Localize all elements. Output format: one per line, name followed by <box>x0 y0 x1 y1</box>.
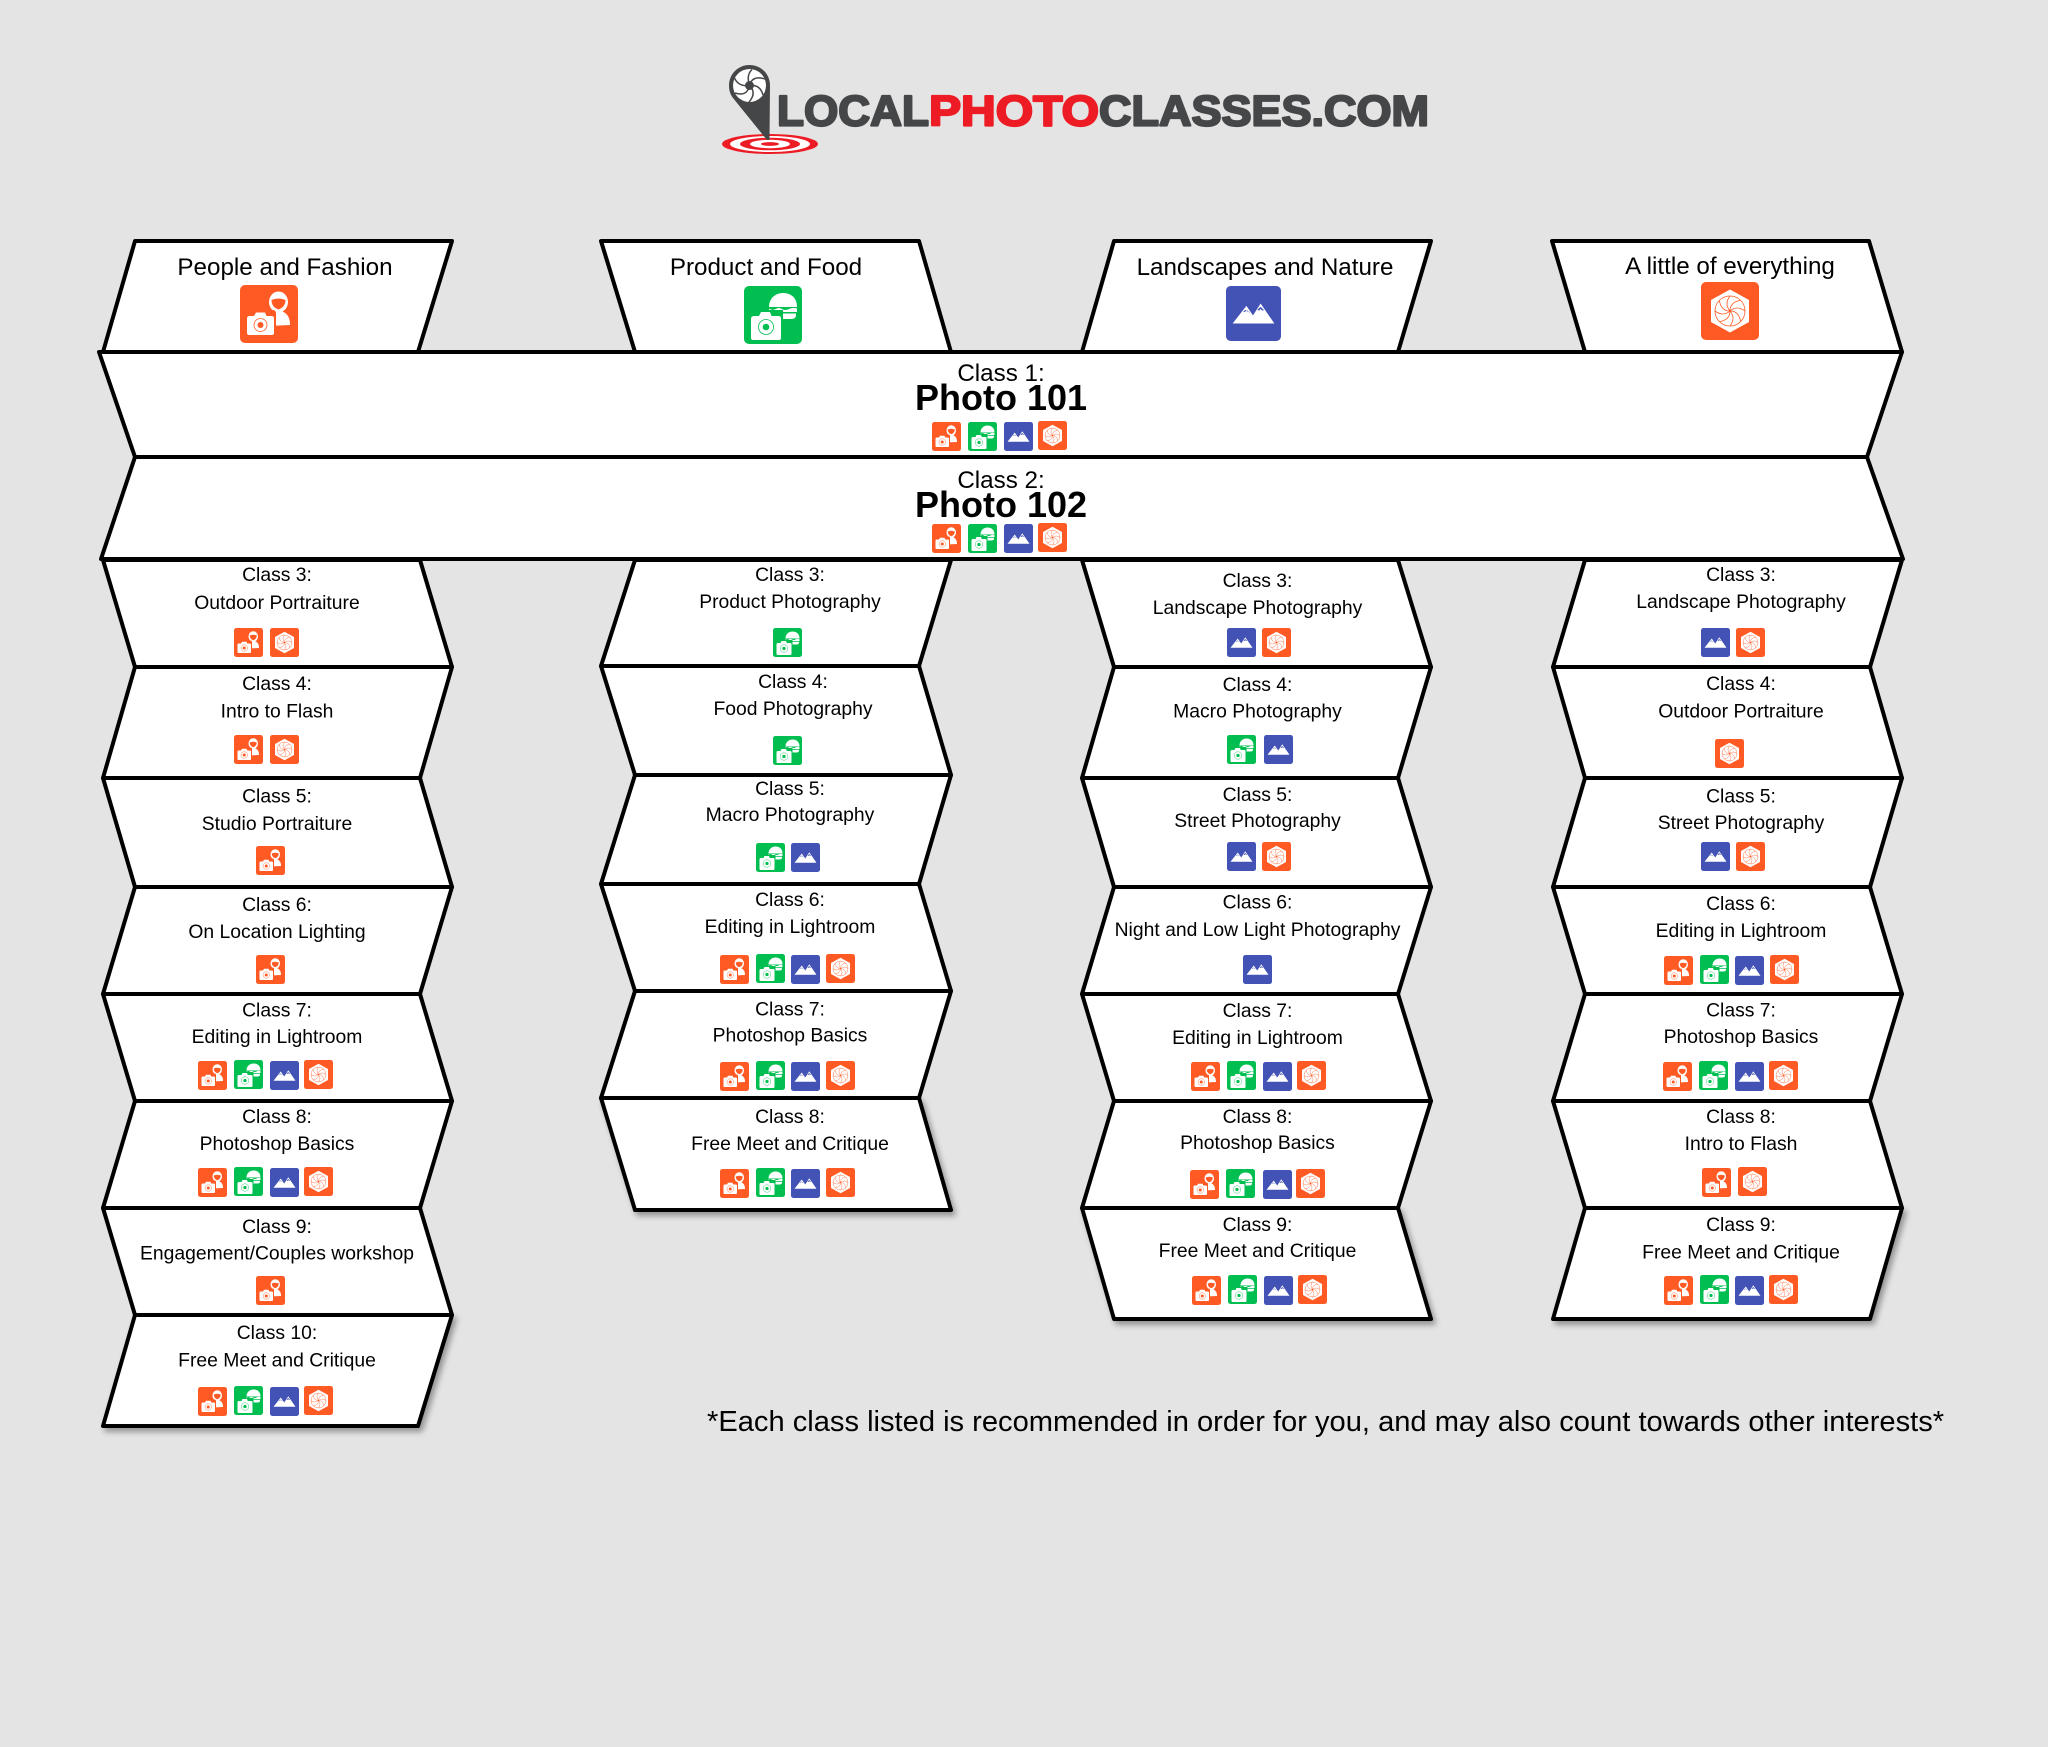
logo wordmark: CLASSES.COM <box>1099 88 1429 136</box>
band: Class 1 Photo 101: Photo 101 <box>915 377 1087 418</box>
card: Editing in Lightroom: Class 6: <box>1706 894 1776 915</box>
card: Free Meet and Critique: Free Meet and Critique <box>691 1134 889 1155</box>
icon: aperture pin <box>729 65 770 140</box>
card: Macro Photography: Class 5: <box>755 779 825 800</box>
card: Macro Photography: Macro Photography <box>1173 702 1342 722</box>
card: Intro to Flash: Intro to Flash <box>221 702 333 722</box>
card: Free Meet and Critique: Class 9: <box>1223 1215 1292 1236</box>
header: People and Fashion <box>103 241 452 352</box>
card: Editing in Lightroom: Class 6: <box>755 890 825 911</box>
card: Food Photography <box>601 666 951 775</box>
card: Street Photography <box>1082 778 1431 887</box>
header: People and Fashion: People and Fashion <box>177 254 393 281</box>
band: Class 1 Photo 101 <box>99 352 1902 457</box>
card: Free Meet and Critique <box>1082 1208 1431 1319</box>
card: On Location Lighting: On Location Lighting <box>188 922 366 943</box>
band: Class 2 Photo 102: Photo 102 <box>915 484 1087 525</box>
card: Free Meet and Critique: Class 10: <box>237 1323 317 1344</box>
card: Editing in Lightroom <box>1553 887 1902 994</box>
card: Landscape Photography: Class 3: <box>1223 571 1292 592</box>
header: A little of everything <box>1552 241 1902 352</box>
column: A little of everything classes <box>1553 560 1902 1319</box>
card: Street Photography: Street Photography <box>1658 813 1825 834</box>
header: Product and Food: Product and Food <box>670 254 862 281</box>
card: Food Photography: Food Photography <box>713 699 873 720</box>
card: Street Photography: Class 5: <box>1706 786 1776 808</box>
card: Photoshop Basics <box>1082 1101 1431 1208</box>
card: Photoshop Basics: Photoshop Basics <box>1180 1133 1335 1154</box>
card: Outdoor Portraiture <box>1553 667 1902 778</box>
card: Landscape Photography: Landscape Photography <box>1636 592 1846 613</box>
card: Free Meet and Critique <box>103 1315 452 1426</box>
card: Photoshop Basics: Photoshop Basics <box>1664 1027 1818 1048</box>
header: A little of everything: A little of everything <box>1625 253 1835 280</box>
card: Landscape Photography <box>1553 560 1902 667</box>
card: Photoshop Basics <box>103 1101 452 1208</box>
band: Class 1 Photo 101: Class 1: <box>957 360 1045 387</box>
card: Photoshop Basics: Class 7: <box>1706 1000 1776 1022</box>
card: Photoshop Basics: Photoshop Basics <box>713 1026 867 1046</box>
card: Engagement/Couples workshop <box>103 1208 452 1315</box>
card: Studio Portraiture: Class 5: <box>242 786 312 808</box>
card: Editing in Lightroom: Editing in Lightroom <box>1172 1028 1343 1049</box>
card: On Location Lighting <box>103 887 452 994</box>
card: Street Photography: Street Photography <box>1174 811 1341 832</box>
logo: LocalPhotoClasses.com <box>722 65 1429 154</box>
column: People and Fashion classes <box>103 560 452 1426</box>
header: Landscapes and Nature <box>1082 241 1431 352</box>
footnote: *Each class listed is recommended in order for you, and may also count towards other interests* <box>707 1406 1944 1438</box>
card: Street Photography: Class 5: <box>1223 785 1292 806</box>
icon: target <box>722 134 818 154</box>
card: Free Meet and Critique: Class 9: <box>1706 1215 1776 1236</box>
card: Editing in Lightroom: Class 7: <box>242 1000 312 1022</box>
card: Landscape Photography: Class 3: <box>1706 565 1776 586</box>
card: Editing in Lightroom: Editing in Lightroom <box>1656 921 1826 942</box>
card: Photoshop Basics: Class 8: <box>242 1107 312 1128</box>
card: Free Meet and Critique: Free Meet and Critique <box>178 1350 376 1372</box>
card: Night and Low Light Photography <box>1082 887 1431 994</box>
card: Studio Portraiture <box>103 778 452 887</box>
card: Photoshop Basics <box>1553 994 1902 1101</box>
band: Class 2 Photo 102 <box>101 457 1903 559</box>
card: Landscape Photography <box>1082 560 1431 667</box>
card: Editing in Lightroom <box>601 884 951 991</box>
card: Night and Low Light Photography: Class 6: <box>1223 892 1292 914</box>
card: Macro Photography: Macro Photography <box>706 805 875 826</box>
card: Photoshop Basics: Photoshop Basics <box>200 1134 354 1155</box>
column: Product and Food classes <box>601 560 951 1210</box>
card: Photoshop Basics <box>601 991 951 1098</box>
card: Photoshop Basics: Class 7: <box>755 1000 825 1020</box>
card: Product Photography <box>601 560 951 666</box>
card: Engagement/Couples workshop: Class 9: <box>242 1217 312 1238</box>
card: Outdoor Portraiture: Outdoor Portraiture <box>1658 702 1824 722</box>
card: Food Photography: Class 4: <box>758 672 828 693</box>
card: On Location Lighting: Class 6: <box>242 895 312 916</box>
card: Editing in Lightroom: Class 7: <box>1223 1001 1292 1022</box>
header: Landscapes and Nature: Landscapes and Nature <box>1137 254 1393 281</box>
card: Outdoor Portraiture: Class 3: <box>242 565 312 586</box>
card: Editing in Lightroom <box>1082 994 1431 1101</box>
card: Editing in Lightroom <box>103 994 452 1101</box>
card: Macro Photography: Class 4: <box>1223 675 1292 696</box>
card: Landscape Photography: Landscape Photography <box>1153 598 1363 619</box>
card: Intro to Flash: Class 8: <box>1706 1107 1776 1128</box>
card: Editing in Lightroom: Editing in Lightroom <box>705 917 875 938</box>
card: Intro to Flash: Class 4: <box>242 674 312 695</box>
card: Product Photography: Product Photography <box>699 592 881 613</box>
logo wordmark: LOCAL <box>777 88 929 136</box>
card: Studio Portraiture: Studio Portraiture <box>202 814 352 835</box>
card: Macro Photography <box>1082 667 1431 778</box>
card: Outdoor Portraiture: Class 4: <box>1706 674 1776 695</box>
card: Outdoor Portraiture: Outdoor Portraiture <box>194 593 360 614</box>
card: Street Photography <box>1553 778 1902 887</box>
card: Free Meet and Critique <box>1553 1208 1902 1319</box>
card: Engagement/Couples workshop: Engagement/Couples workshop <box>140 1244 414 1264</box>
card: Macro Photography <box>601 775 951 884</box>
card: Free Meet and Critique: Class 8: <box>755 1107 825 1128</box>
card: Editing in Lightroom: Editing in Lightroom <box>192 1027 362 1048</box>
logo wordmark: PHOTO <box>929 88 1099 136</box>
card: Intro to Flash: Intro to Flash <box>1685 1134 1797 1155</box>
header: Product and Food <box>601 241 951 352</box>
card: Night and Low Light Photography: Night and Low Light Photography <box>1115 920 1401 941</box>
logo wordmark <box>777 88 1429 136</box>
card: Free Meet and Critique <box>601 1098 951 1210</box>
band: Class 2 Photo 102: Class 2: <box>957 467 1045 494</box>
card: Outdoor Portraiture <box>103 560 452 667</box>
card: Product Photography: Class 3: <box>755 565 825 586</box>
card: Intro to Flash <box>1553 1101 1902 1208</box>
card: Free Meet and Critique: Free Meet and Critique <box>1642 1242 1840 1264</box>
card: Free Meet and Critique: Free Meet and Critique <box>1159 1241 1356 1262</box>
card: Intro to Flash <box>103 667 452 778</box>
card: Photoshop Basics: Class 8: <box>1223 1107 1292 1128</box>
column: Landscapes and Nature classes <box>1082 560 1431 1319</box>
